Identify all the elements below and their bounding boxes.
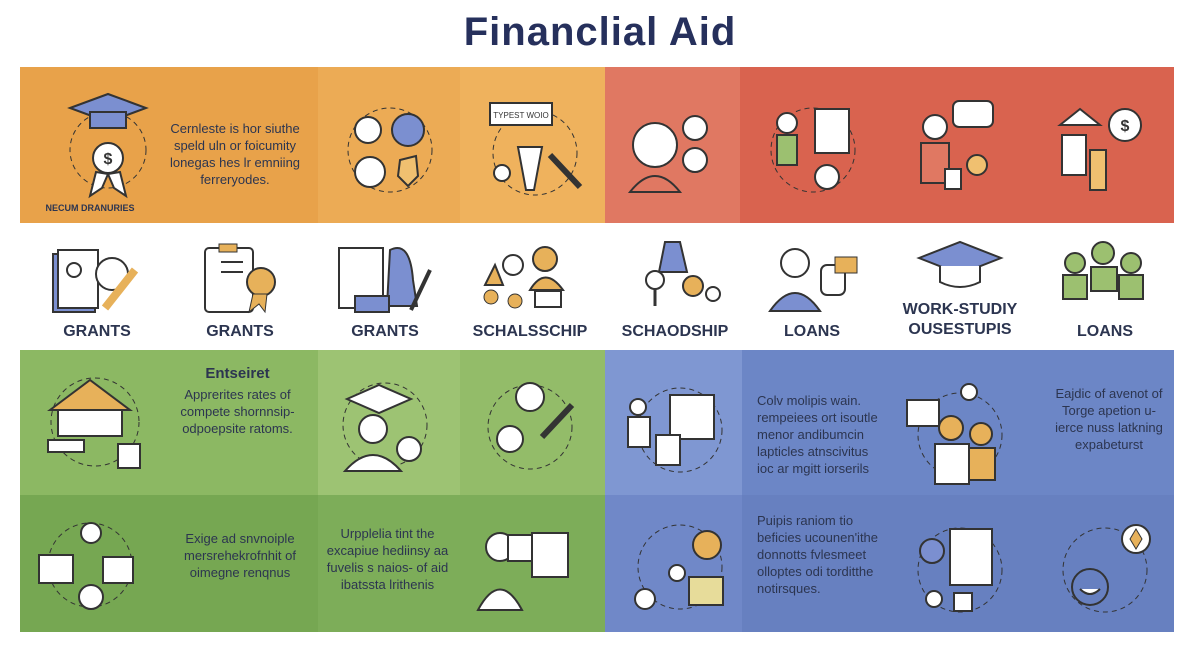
icon: graduation cap (916, 240, 1004, 288)
text block: blue row 4 description: Puipis raniom tio beficies ucounen'ithe donnotts fvlesmeet olloptes odi torditthe notirsques. (757, 513, 878, 596)
icon: person with board (476, 532, 569, 611)
icon: house and dollar (1057, 108, 1142, 191)
icon: presenter with documents (770, 108, 856, 192)
text block: green row 4 description 2: Urpplelia tint the excapiue hediinsy aa fuvelis s naios- of aid ibatssta lrithenis (327, 526, 448, 592)
icon: speech bubble and trophy: TYPEST WOIO (493, 111, 549, 120)
label: orange small caption: NECUM DRANURIES (45, 203, 134, 213)
panel: green row 4 (20, 495, 605, 632)
label: work-study: WORK-STUDIY OUSESTUPIS (903, 301, 1017, 338)
icon: gears and medal (348, 108, 432, 192)
panel: red row (605, 67, 1174, 223)
icon: work-study team (906, 383, 1002, 485)
title: Financlial Aid (464, 10, 736, 54)
icon: speech bubble and trophy (489, 102, 582, 196)
icon: student face (628, 115, 708, 193)
icon: graduation cap award: $ (104, 151, 113, 168)
icon: person with documents (918, 528, 1002, 612)
icon: loans person (768, 248, 858, 312)
text block: green heading + description (180, 365, 295, 436)
label: scholarship 1: SCHALSSCHIP (473, 323, 587, 340)
panel: orange grants row (20, 67, 605, 223)
icon: clipboard medal (204, 244, 276, 314)
icon: scholarship 2 (645, 241, 721, 306)
icon: scholarship group (483, 246, 565, 308)
icon: notebook (338, 247, 432, 313)
label: scholarship 2: SCHAODSHIP (622, 323, 728, 340)
text block: green heading + description: Apprerites rates of compete shornnsip- odpoepsite ratoms. (180, 387, 295, 436)
icon: graduation cap award (67, 92, 149, 198)
panel: green row 3 (20, 350, 605, 495)
icon: people and gear (38, 522, 134, 610)
icon: coins and pen (488, 382, 574, 470)
icon: engineer with box (634, 524, 724, 610)
text block: green heading + description: Entseiret (205, 365, 270, 382)
icon: chat and people (920, 100, 994, 190)
text block: green row 4 description 1: Exige ad snvnoiple mersrehekrofnhit of oimegne renqnus (184, 531, 296, 580)
text block: orange description: Cernleste is hor siuthe speld uln or foicumity lonegas hes lr emniing ferreryodes. (170, 121, 300, 187)
panel: blue row 3 (605, 350, 1174, 495)
icon: house and dollar: $ (1121, 118, 1130, 135)
icon: smiley with ethereum (1062, 524, 1151, 612)
label: loans 2: LOANS (1077, 323, 1133, 340)
label: grants 2: GRANTS (206, 323, 274, 340)
icon: house with money (47, 378, 141, 469)
icon: presenter with board (627, 388, 722, 472)
label: grants 3: GRANTS (351, 323, 419, 340)
panel: blue row 4 (605, 495, 1174, 632)
label: grants 1: GRANTS (63, 323, 131, 340)
text block: blue description 1: Colv molipis wain. rempeiees ort isoutle menor andibumcin lapticles atnscivitus ioc ar mgitt iorserils (757, 393, 878, 476)
icon: clipboard grants 1 (52, 249, 138, 313)
icon: graduate with coin (342, 382, 428, 472)
label: loans 1: LOANS (784, 323, 840, 340)
icon: loans people (1062, 241, 1144, 300)
text block: blue description 2: Eajdic of avenot of Torge apetion u- ierce nuss latkning expabeturst (1055, 386, 1163, 452)
